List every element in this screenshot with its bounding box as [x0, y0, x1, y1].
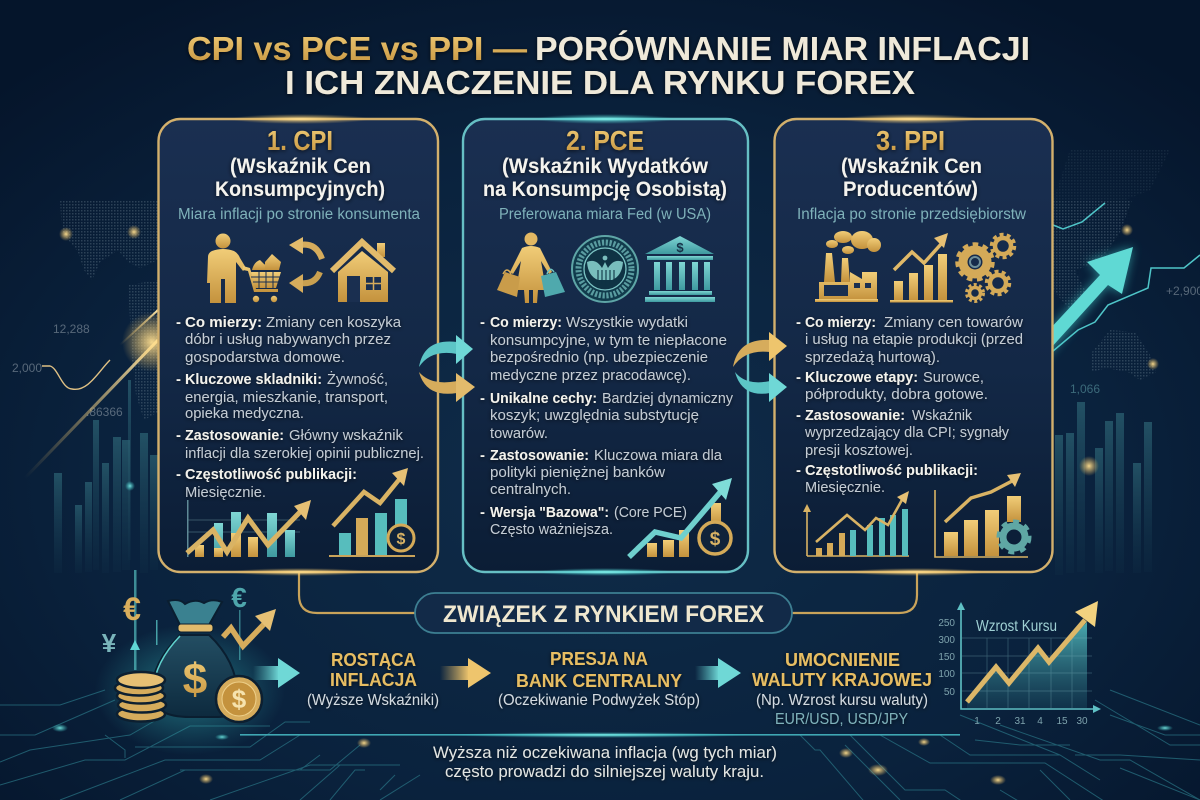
currency symbols: € [231, 582, 247, 613]
flow step: central bank pressure: (Oczekiwanie Podwyżek Stóp) [498, 692, 700, 709]
text block: PCE details: Unikalne cechy: [490, 390, 597, 407]
bag: $ [183, 655, 207, 704]
text block: CPI details: Kluczowe skladniki: [185, 371, 322, 388]
text block: CPI details: Co mierzy: [185, 314, 262, 331]
text block: PCE details: (Core PCE) [614, 504, 687, 521]
text block: PPI details: Surowce, [923, 369, 984, 386]
title [187, 30, 1030, 101]
text block: PCE details: Zastosowanie: [490, 447, 589, 464]
footer note: Wyższa niż oczekiwana inflacja (wg tych miar) [433, 743, 777, 762]
panel glow highlights [230, 114, 370, 576]
text block: PCE details: Wszystkie wydatki [566, 314, 688, 331]
flow step: rising inflation: ROSTĄCA [331, 650, 416, 670]
text block: CPI details: Zmiany cen koszyka [266, 314, 402, 331]
chart icon: mixed bars and line [803, 491, 909, 556]
text block: PPI details: presji kosztowej. [805, 442, 913, 459]
big coin [216, 676, 262, 722]
heading: PPI: (Wskaźnik Cen [841, 154, 982, 178]
background numbers: 12,288 [53, 322, 90, 336]
text block: PPI details: i usług na etapie produkcji (przed [805, 331, 1023, 348]
chart icon: teal arrow with coin: $ [710, 529, 721, 550]
panel: PCE [463, 114, 748, 576]
chart axis labels: 31 [1014, 716, 1026, 727]
chart axis labels: 100 [938, 669, 955, 680]
text block: PCE details: Kluczowa miara dla [594, 447, 723, 464]
text block: PPI details: - [796, 407, 801, 424]
text block: PCE details: - [480, 314, 485, 331]
heading: CPI [215, 125, 385, 201]
text block: CPI details: - [176, 427, 181, 444]
text block: PCE details: bezpośrednio (np. ubezpieczenie [490, 349, 708, 366]
panel glow highlights [535, 114, 675, 576]
chart icon: bars with coin: $ [397, 531, 406, 548]
panel glow highlights [840, 114, 987, 576]
currency symbols: € [123, 591, 141, 627]
arrows between PCE and PPI [733, 332, 787, 402]
currency light streaks [130, 570, 240, 670]
background numbers: 2,000 [12, 361, 42, 375]
flow step: rising inflation: INFLACJA [330, 670, 417, 690]
text block: PPI details [796, 314, 1023, 496]
icon: exchange arrows [289, 237, 322, 293]
coin stack [115, 672, 166, 722]
chart axis labels: 50 [944, 687, 955, 698]
text block: CPI details: Główny wskaźnik [289, 427, 403, 444]
gold zigzag arrow [223, 609, 276, 646]
background numbers: 1,066 [1070, 382, 1100, 396]
currency symbols [102, 582, 247, 658]
chart axis labels: 30 [1076, 716, 1088, 727]
heading: CPI: (Wskaźnik Cen [230, 154, 371, 178]
heading: PCE: 2. PCE [566, 125, 644, 156]
text block: CPI details: opieka medyczna. [185, 405, 304, 422]
divider glow [240, 732, 960, 738]
text block: PPI details: - [796, 369, 801, 386]
flow step: central bank pressure: BANK CENTRALNY [516, 671, 682, 691]
text block: CPI details: - [176, 314, 181, 331]
heading: PCE: (Wskaźnik Wydatków [502, 154, 708, 178]
text block: CPI details: Żywność, [327, 370, 388, 388]
text block: CPI details: dóbr i usług nabywanych przez [185, 331, 391, 348]
text block: PCE details: medyczne przez pracodawcę). [490, 367, 691, 384]
text block: PCE details: Co mierzy: [490, 314, 562, 331]
chart area [967, 622, 1087, 708]
title: PORÓWNANIE MIAR INFLACJI [535, 30, 1030, 67]
text block: PPI details: - [796, 314, 801, 331]
heading: PCE: na Konsumpcję Osobistą) [483, 177, 727, 201]
heading: PPI [841, 125, 982, 201]
forex badge [415, 593, 792, 633]
text block: PPI details: półprodukty, dobra gotowe. [805, 386, 988, 403]
subtitle: CPI: Miara inflacji po stronie konsumenta [178, 206, 420, 223]
icon: shopper with cart [207, 234, 281, 303]
text block: PCE details: - [480, 504, 485, 521]
flow arrow: teal 2 [695, 658, 741, 688]
chart axis labels: 2 [995, 716, 1001, 727]
heading: CPI: Konsumpcyjnych) [215, 177, 385, 201]
text block: PCE details: - [480, 390, 485, 407]
text block: PPI details: wyprzedzający dla CPI; sygnały [804, 424, 1009, 441]
icon: rising bar chart [890, 233, 953, 302]
panel: PPI [774, 114, 1052, 576]
flow step: currency appreciation: (Np. Wzrost kursu waluty) [756, 692, 928, 709]
icon: house [332, 242, 394, 302]
text block: CPI details [176, 314, 424, 501]
chart grid [962, 638, 1092, 708]
text block: CPI details: - [176, 371, 181, 388]
chart axis labels [938, 618, 1088, 727]
chart axes [957, 602, 1101, 713]
footer note: często prowadzi do silniejszej waluty kraju. [445, 762, 764, 781]
background numbers: .86366 [86, 405, 123, 419]
chart icon: zigzag bars [187, 500, 311, 557]
subtitle: PCE: Preferowana miara Fed (w USA) [499, 206, 711, 223]
icon: bank building: $ [676, 240, 684, 255]
text block: PPI details: Wskaźnik [912, 407, 972, 424]
background gold trend [25, 224, 1159, 491]
chart icon: bars with coin [329, 468, 415, 557]
icon: bank building [645, 236, 715, 302]
chart axis labels: 1 [974, 716, 980, 727]
heading: PPI: Producentów) [843, 177, 978, 201]
text block: PCE details: - [480, 447, 485, 464]
flow step: currency appreciation: WALUTY KRAJOWEJ [752, 670, 932, 690]
flow arrow: teal 1 [253, 658, 300, 688]
text block: PPI details: Częstotliwość publikacji: [805, 462, 978, 479]
heading: PCE [483, 125, 727, 201]
flow step: currency appreciation: EUR/USD, USD/JPY [775, 711, 908, 728]
heading: PPI: 3. PPI [876, 125, 945, 156]
chart axis labels: 15 [1056, 716, 1068, 727]
currency symbols: ¥ [102, 628, 117, 658]
chart axis labels: 150 [938, 652, 955, 663]
text block: PPI details: Co mierzy: [805, 314, 876, 331]
exchange rate chart [938, 601, 1101, 727]
flow step: central bank pressure [498, 649, 700, 709]
panel: CPI [158, 114, 438, 576]
chart icon: teal arrow with coin [629, 478, 732, 557]
text block: CPI details: energia, mieszkanie, transport, [185, 389, 388, 406]
text block: PPI details: - [796, 462, 801, 479]
flow arrow: gold [440, 658, 491, 688]
arrows between CPI and PCE [419, 335, 475, 402]
chart trend arrow [967, 601, 1098, 702]
flow step: central bank pressure: PRESJA NA [550, 649, 648, 669]
text block: PCE details: polityki pieniężnej banków [490, 464, 665, 481]
text block: PCE details: Wersja "Bazowa": [490, 504, 609, 521]
text block: CPI details: Częstotliwość publikacji: [185, 466, 357, 483]
flow step: currency appreciation [752, 650, 932, 728]
text block: CPI details: Miesięcznie. [185, 484, 266, 501]
icon: factory [815, 231, 881, 302]
text block: CPI details: - [176, 466, 181, 483]
big coin: $ [232, 684, 247, 714]
text block: CPI details: gospodarstwa domowe. [185, 349, 345, 366]
text block: PCE details: Często ważniejsza. [490, 521, 613, 538]
background teal trend [1040, 203, 1200, 362]
chart axis labels: 4 [1037, 716, 1043, 727]
background numbers [12, 284, 1200, 419]
chart icon: bars with gear [935, 473, 1030, 557]
heading: CPI: 1. CPI [267, 125, 333, 156]
chart axis labels: 250 [938, 618, 955, 629]
background bars left [54, 380, 158, 573]
flow step: currency appreciation: UMOCNIENIE [785, 650, 900, 670]
text block: PPI details: Zmiany cen towarów [884, 314, 1023, 331]
text block: PCE details: Bardziej dynamiczny [602, 390, 733, 407]
text block: PCE details: koszyk; uwzględnia substytucję [490, 407, 699, 424]
text block: CPI details: Zastosowanie: [185, 427, 284, 444]
chart title: Wzrost Kursu [976, 618, 1057, 635]
title: I ICH ZNACZENIE DLA RYNKU FOREX [285, 64, 915, 101]
icon: woman with shopping bags [497, 232, 565, 303]
chart axis labels: 300 [938, 635, 955, 646]
text block: PPI details: Miesięcznie. [805, 479, 885, 496]
subtitle: PPI: Inflacja po stronie przedsiębiorstw [797, 206, 1027, 223]
flow step: rising inflation [307, 650, 439, 709]
world map dots [60, 150, 1170, 420]
flow step: rising inflation: (Wyższe Wskaźniki) [307, 692, 439, 709]
text block: CPI details: inflacji dla szerokiej opinii publicznej. [185, 445, 424, 462]
icon: federal reserve seal [572, 236, 638, 302]
circuit nodes [52, 724, 1173, 785]
footer note [433, 743, 777, 781]
circuit traces [0, 690, 1200, 800]
connector lines to forex badge [299, 572, 917, 613]
money bag illustration [95, 570, 285, 755]
bag [152, 600, 238, 717]
title: CPI vs PCE vs PPI — [187, 30, 527, 67]
icon: gears [958, 234, 1014, 302]
background bars right [1055, 402, 1152, 575]
forex badge: ZWIĄZEK Z RYNKIEM FOREX [443, 601, 764, 628]
text block: PCE details: centralnych. [490, 481, 571, 498]
text block: PPI details: sprzedażą hurtową). [805, 349, 940, 366]
text block: PCE details [480, 314, 733, 538]
text block: PCE details: konsumpcyjne, w tym te niepłacone [490, 332, 727, 349]
text block: PPI details: Zastosowanie: [805, 407, 905, 424]
text block: PCE details: towarów. [490, 425, 548, 442]
text block: PPI details: Kluczowe etapy: [805, 369, 918, 386]
big teal arrow [1030, 247, 1133, 365]
